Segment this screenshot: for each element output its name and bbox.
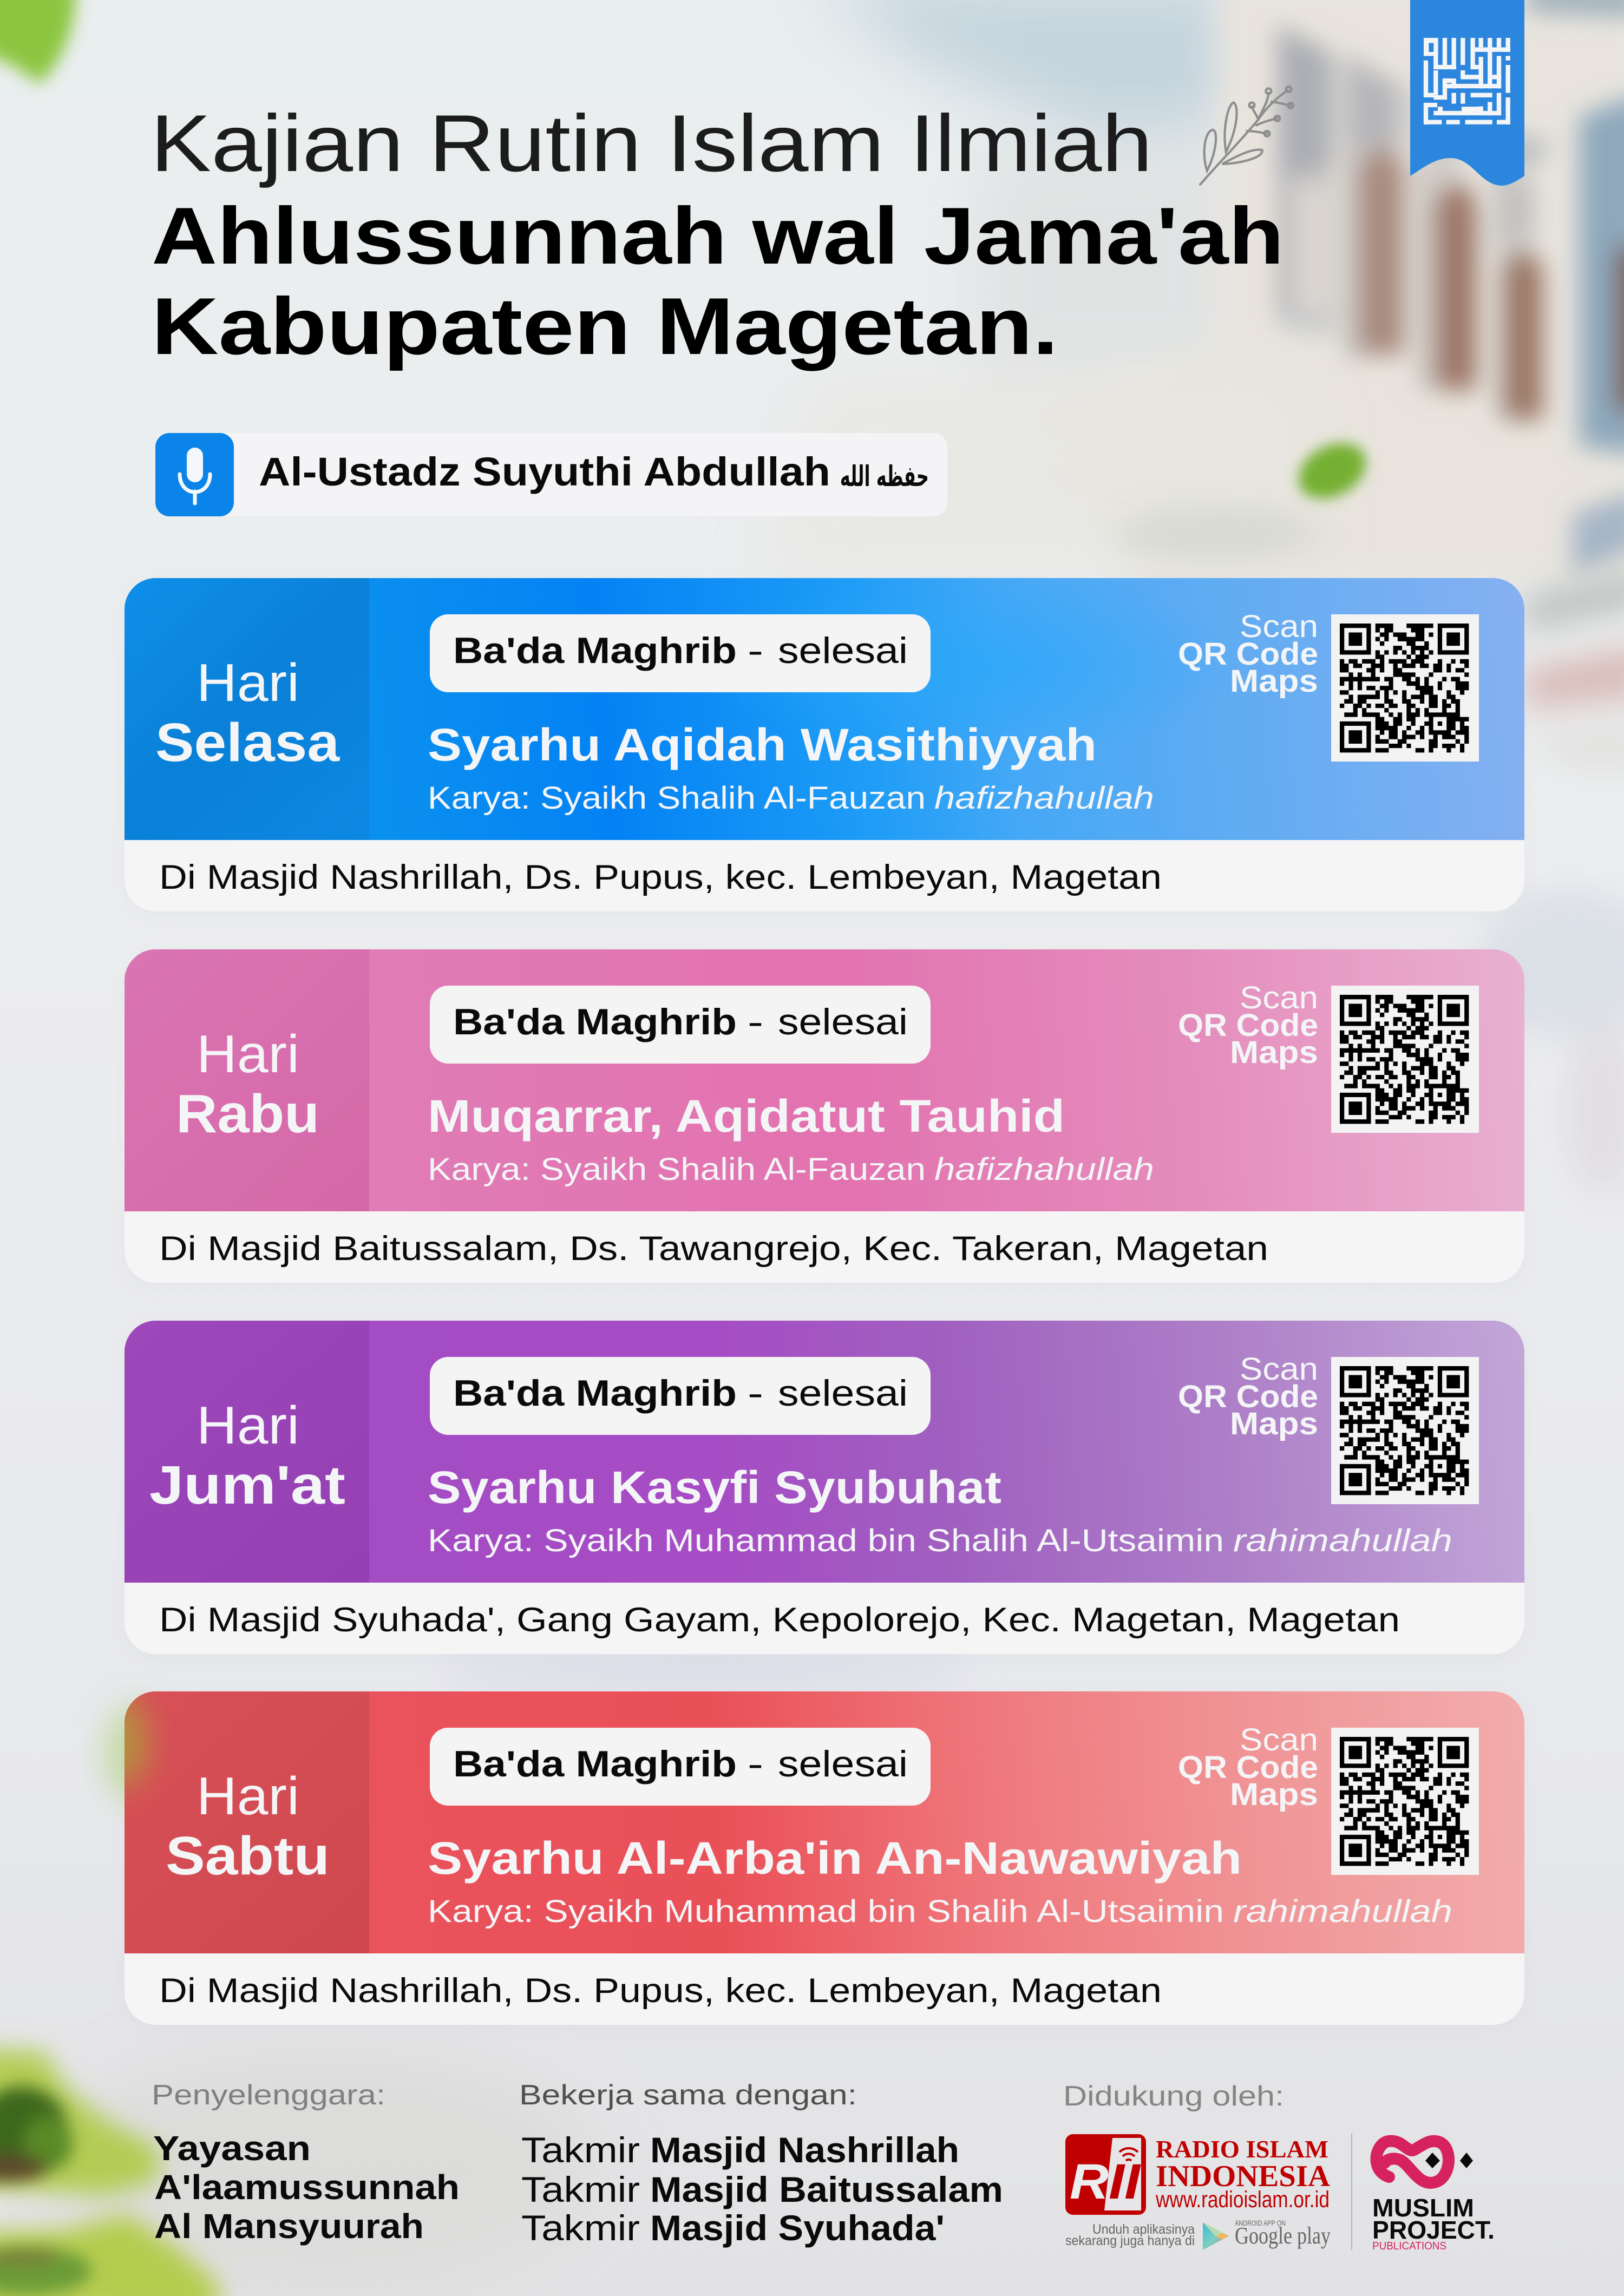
qr caption: Scan	[1240, 1722, 1318, 1757]
footer: organizer	[152, 2079, 460, 2246]
divider	[1351, 2134, 1352, 2250]
footer: partners: Masjid Syuhada'	[650, 2208, 945, 2248]
main colored band	[125, 1691, 1524, 1953]
time pill: Ba'da Maghrib	[453, 1001, 737, 1042]
day panel: Selasa	[155, 712, 340, 773]
qr caption: Maps	[1230, 1406, 1318, 1441]
day panel	[125, 949, 369, 1211]
logo: Muslim Project: PROJECT.	[1372, 2216, 1495, 2244]
location strip	[125, 578, 1524, 911]
location strip: Di Masjid Syuhada', Gang Gayam, Kepolorejo, Kec. Magetan, Magetan	[159, 1601, 1400, 1639]
qr caption: QR Code	[1178, 1379, 1318, 1414]
qr caption	[1178, 1352, 1318, 1441]
logo: Radio Islam Indonesia	[1065, 2134, 1331, 2250]
day panel	[125, 1321, 369, 1583]
time pill	[430, 614, 931, 692]
study title: Syarhu Al-Arba'in An-Nawawiyah	[428, 1833, 1242, 1884]
qr code	[1331, 986, 1479, 1133]
location strip: Di Masjid Nashrillah, Ds. Pupus, kec. Lembeyan, Magetan	[159, 858, 1162, 896]
speaker name: Al-Ustadz Suyuthi Abdullah	[259, 449, 830, 494]
footer: partners: Takmir	[521, 2130, 640, 2170]
author: Karya: Syaikh Muhammad bin Shalih Al-Utsaimin	[428, 1523, 1224, 1558]
soft streaks right of cards	[1524, 568, 1624, 769]
footer: partners: Bekerja sama dengan:	[519, 2079, 857, 2111]
bookmark ribbon with kufi emblem	[1410, 0, 1524, 186]
logo: Radio Islam Indonesia: Unduh aplikasinya	[1092, 2222, 1195, 2237]
qr caption: QR Code	[1178, 1008, 1318, 1043]
study title: Muqarrar, Aqidatut Tauhid	[428, 1091, 1065, 1142]
author: rahimahullah	[1233, 1523, 1452, 1558]
day panel: Jum'at	[149, 1455, 345, 1516]
panel: Sabtu	[97, 1691, 1524, 2030]
author: Karya: Syaikh Shalih Al-Fauzan	[428, 1152, 926, 1187]
title	[150, 98, 1284, 371]
logo: Radio Islam Indonesia: R	[1070, 2154, 1109, 2209]
footer: organizer: Al Mansyuurah	[154, 2207, 424, 2246]
panel: Jum'at	[125, 1321, 1524, 1659]
footer: organizer: Penyelenggara:	[152, 2079, 385, 2111]
icon: decorative sprig	[1200, 87, 1293, 185]
day panel: Hari	[197, 1024, 299, 1084]
logo: Radio Islam Indonesia: ANDROID APP ON	[1235, 2219, 1286, 2227]
qr caption: QR Code	[1178, 1750, 1318, 1785]
author: rahimahullah	[1233, 1894, 1452, 1929]
footer: partners: Takmir	[521, 2169, 640, 2209]
arabic honorific: حفظه الله	[840, 460, 929, 493]
footer: supporters	[1063, 2081, 1495, 2252]
author: Karya: Syaikh Shalih Al-Fauzan	[428, 780, 926, 816]
qr code	[1331, 614, 1479, 762]
leaf top-left	[0, 0, 76, 84]
time pill: selesai	[778, 1373, 908, 1414]
windows	[1278, 0, 1624, 577]
qr caption: Scan	[1240, 980, 1318, 1015]
location strip	[125, 949, 1524, 1283]
footer: organizer: A'laamussunnah	[154, 2168, 460, 2207]
logo: Muslim Project: MUSLIM	[1372, 2194, 1474, 2222]
time pill: Ba'da Maghrib	[453, 1743, 737, 1785]
qr caption	[1178, 980, 1318, 1070]
time pill	[430, 986, 931, 1064]
title: Kajian Rutin Islam Ilmiah	[150, 98, 1152, 188]
day panel: Sabtu	[166, 1826, 330, 1886]
author	[428, 1152, 1154, 1187]
location strip	[125, 1321, 1524, 1654]
time pill	[430, 1357, 931, 1435]
kufi emblem	[1424, 38, 1510, 124]
footer: partners: Masjid Nashrillah	[650, 2130, 959, 2170]
qr caption: Scan	[1240, 609, 1318, 644]
title: Ahlussunnah wal Jama'ah	[152, 191, 1284, 281]
icon: microphone	[155, 433, 234, 516]
qr caption	[1178, 609, 1318, 699]
day panel: Hari	[197, 653, 299, 712]
logo: Radio Islam Indonesia: INDONESIA	[1156, 2160, 1331, 2193]
leaf right	[1289, 432, 1376, 510]
qr caption: Maps	[1230, 1777, 1318, 1812]
main colored band	[125, 578, 1524, 840]
qr caption: Scan	[1240, 1352, 1318, 1387]
footer: partners: Masjid Baitussalam	[650, 2169, 1003, 2209]
main colored band	[125, 1321, 1524, 1583]
author	[428, 1523, 1452, 1558]
qr caption: QR Code	[1178, 637, 1318, 672]
time pill: -	[748, 1373, 763, 1414]
time pill	[430, 1728, 931, 1806]
qr caption: Maps	[1230, 664, 1318, 699]
time pill: selesai	[778, 1743, 908, 1785]
time pill: -	[748, 1001, 763, 1042]
plant bottom-left	[0, 2049, 219, 2296]
logo: Radio Islam Indonesia: RADIO ISLAM	[1156, 2135, 1328, 2163]
sky	[812, 0, 1245, 146]
time pill: selesai	[778, 1001, 908, 1042]
author: hafizhahullah	[934, 780, 1154, 816]
title: Kabupaten Magetan.	[152, 281, 1058, 371]
logo: Radio Islam Indonesia: www.radioislam.or.id	[1155, 2187, 1330, 2213]
footer: organizer: Yayasan	[153, 2129, 311, 2168]
speaker pill	[155, 433, 947, 516]
panel: Rabu	[125, 949, 1524, 1288]
day panel: Hari	[197, 1766, 299, 1826]
wall	[1029, 0, 1624, 585]
logo: Radio Islam Indonesia: II	[1109, 2154, 1142, 2209]
qr code	[1331, 1728, 1479, 1875]
day panel	[97, 1691, 369, 1953]
day panel: Rabu	[176, 1084, 319, 1144]
logo: Radio Islam Indonesia: sekarang juga hanya di	[1065, 2233, 1195, 2248]
author: Karya: Syaikh Muhammad bin Shalih Al-Utsaimin	[428, 1894, 1224, 1929]
time pill: -	[748, 1743, 763, 1785]
logo: Radio Islam Indonesia: Google play	[1235, 2222, 1331, 2249]
main colored band	[125, 949, 1524, 1211]
day panel	[125, 578, 369, 840]
qr caption: Maps	[1230, 1035, 1318, 1070]
logo: Muslim Project: PUBLICATIONS	[1372, 2240, 1446, 2252]
author: hafizhahullah	[934, 1152, 1154, 1187]
author	[428, 1894, 1452, 1929]
location strip: Di Masjid Nashrillah, Ds. Pupus, kec. Lembeyan, Magetan	[159, 1972, 1162, 2010]
footer: partners: Takmir	[521, 2208, 640, 2248]
footer: partners	[519, 2079, 1003, 2248]
time pill: Ba'da Maghrib	[453, 630, 737, 671]
study title: Syarhu Kasyfi Syubuhat	[428, 1462, 1001, 1513]
qr caption	[1178, 1722, 1318, 1812]
time pill: selesai	[778, 630, 908, 671]
study title: Syarhu Aqidah Wasithiyyah	[428, 719, 1097, 770]
location strip	[125, 1691, 1524, 2025]
logo: Muslim Project	[1372, 2141, 1495, 2252]
footer: supporters: Didukung oleh:	[1063, 2081, 1284, 2112]
time pill: -	[748, 630, 763, 671]
qr code	[1331, 1357, 1479, 1504]
icon: google play	[1203, 2222, 1229, 2250]
time pill: Ba'da Maghrib	[453, 1373, 737, 1414]
location strip: Di Masjid Baitussalam, Ds. Tawangrejo, Kec. Takeran, Magetan	[159, 1230, 1268, 1268]
panel: Selasa	[125, 574, 1524, 916]
day panel: Hari	[197, 1395, 299, 1455]
author	[428, 780, 1154, 816]
